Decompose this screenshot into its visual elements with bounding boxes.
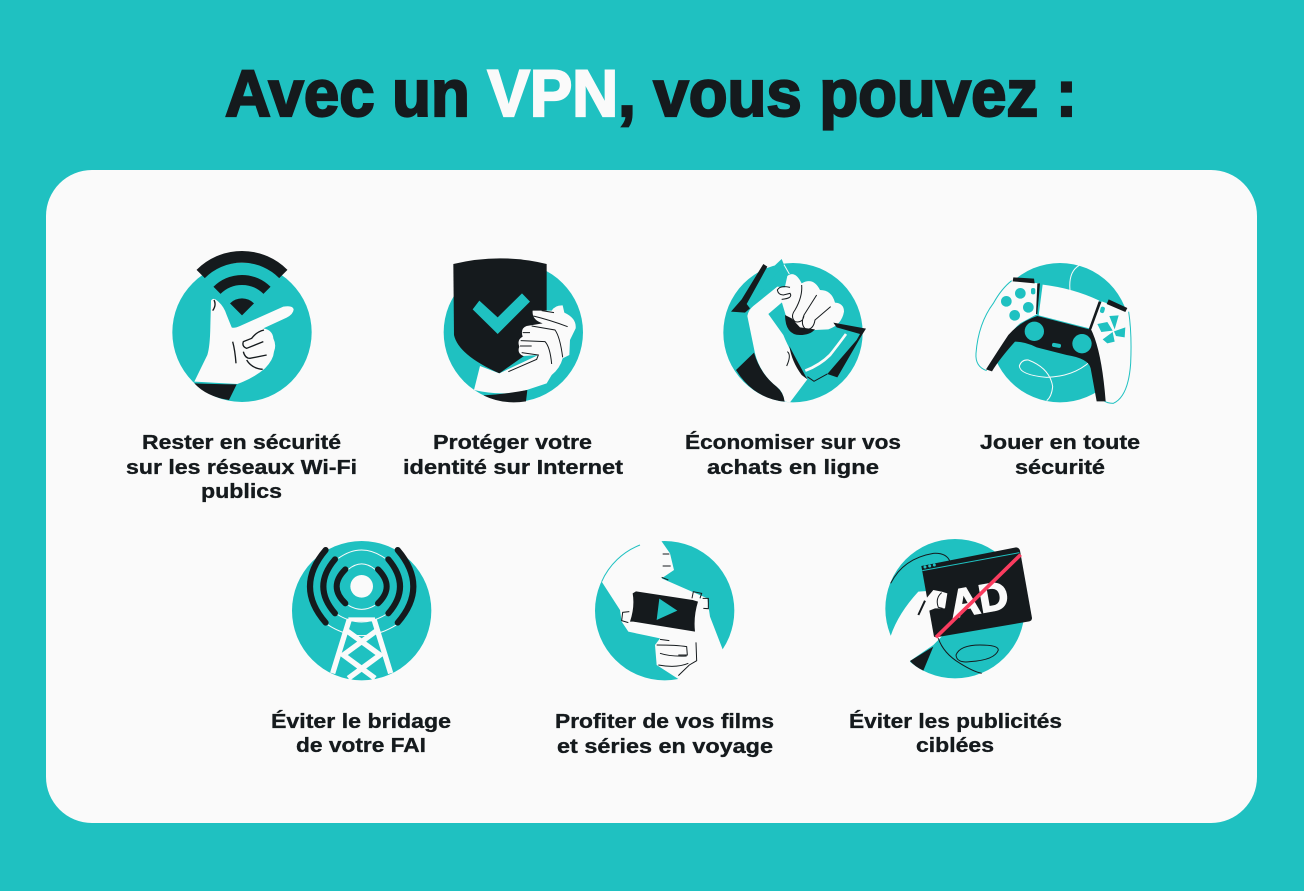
- icon: blocked ad: [877, 539, 1032, 678]
- label: films: [555, 710, 774, 758]
- icon: shield hand: [444, 258, 583, 402]
- label: gaming: sécurité: [1015, 456, 1105, 479]
- icon: blocked ad: AD: [947, 573, 1012, 627]
- title: Avec un VPN, vous pouvez :: [225, 56, 1077, 130]
- label: wifi: publics: [201, 480, 282, 503]
- label: gaming: Jouer en toute: [980, 431, 1140, 454]
- label: ads: Éviter les publicités: [849, 710, 1062, 733]
- label: throttling: [271, 710, 451, 757]
- label: throttling: Éviter le bridage: [271, 710, 451, 733]
- label: shopping: [685, 431, 901, 479]
- icon: fist with banknote: [723, 259, 866, 402]
- label: shopping: achats en ligne: [707, 456, 879, 479]
- label: throttling: de votre FAI: [296, 734, 426, 757]
- label: gaming: [980, 431, 1140, 479]
- label: ads: [849, 710, 1062, 757]
- label: wifi: Rester en sécurité: [142, 431, 341, 454]
- icon: wifi hand: [172, 257, 312, 402]
- panel: benefits: [46, 170, 1257, 823]
- icon: antenna tower: [292, 541, 431, 680]
- label: identity: identité sur Internet: [403, 456, 623, 479]
- label: identity: [403, 431, 623, 479]
- label: identity: Protéger votre: [433, 431, 592, 454]
- label: films: Profiter de vos films: [555, 710, 774, 733]
- label: wifi: sur les réseaux Wi-Fi: [126, 456, 357, 479]
- label: films: et séries en voyage: [557, 735, 773, 758]
- icon: video between hands: [590, 533, 753, 697]
- label: ads: ciblées: [916, 734, 994, 757]
- icon: game controller: [976, 263, 1131, 403]
- label: wifi: [126, 431, 357, 503]
- label: shopping: Économiser sur vos: [685, 431, 901, 454]
